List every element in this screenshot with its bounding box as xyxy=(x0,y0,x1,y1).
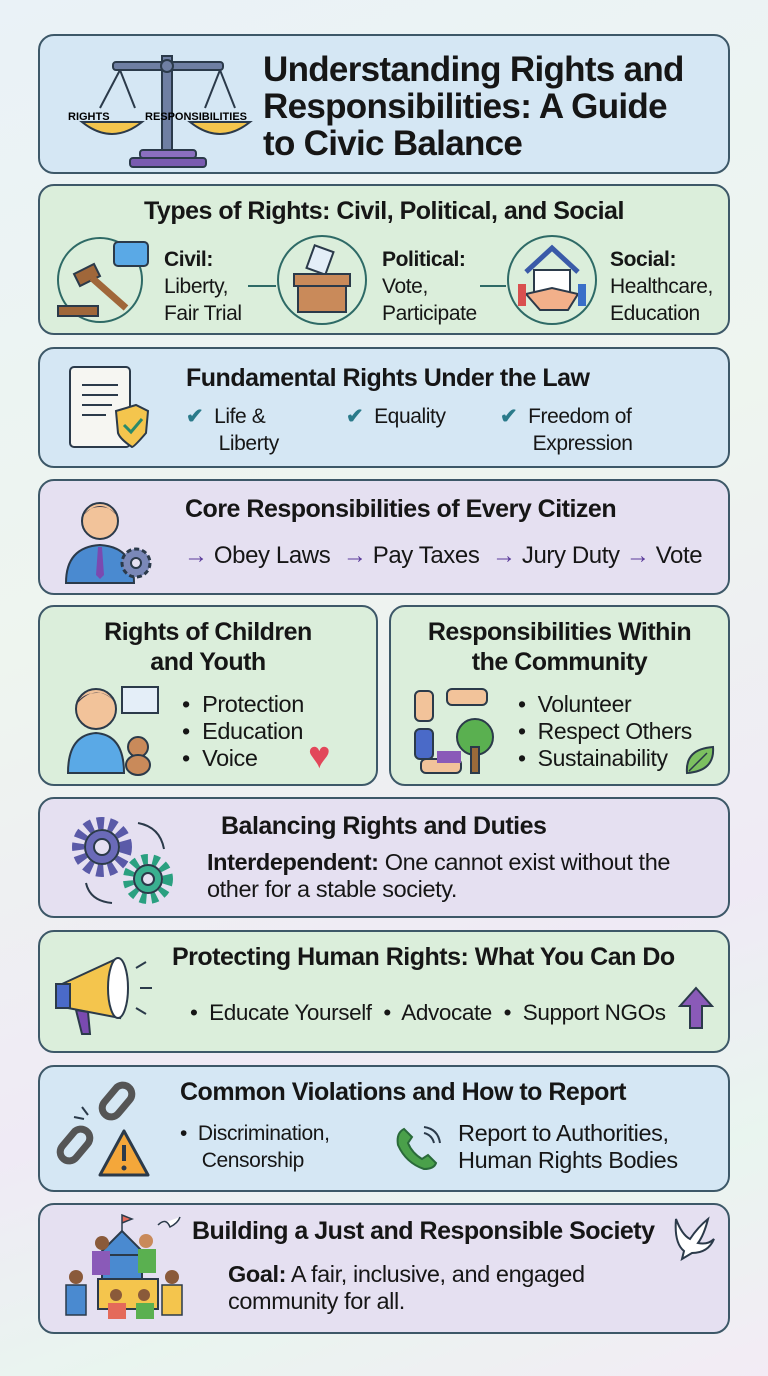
icon: phone xyxy=(396,1126,441,1170)
bullets: • Respect Others xyxy=(518,718,692,744)
icon: people castle xyxy=(65,1214,183,1319)
panel: violations xyxy=(38,1065,730,1192)
violations list: • Discrimination, xyxy=(180,1122,330,1145)
icon: scales: RESPONSIBILITIES xyxy=(145,111,247,123)
heading: Fundamental Rights Under the Law xyxy=(186,364,589,392)
goal text: community for all. xyxy=(228,1288,405,1314)
title text xyxy=(263,50,684,163)
civil text xyxy=(164,248,242,325)
icon: megaphone xyxy=(55,957,152,1035)
icon: document shield xyxy=(69,366,149,448)
panel: title xyxy=(38,34,730,174)
heading: and Youth xyxy=(150,648,266,676)
goal text xyxy=(228,1261,585,1314)
title text: to Civic Balance xyxy=(263,124,522,163)
checklist: ✔ Life & xyxy=(186,405,265,428)
icon: ballot box xyxy=(277,235,367,325)
heading: Protecting Human Rights: What You Can Do xyxy=(172,943,675,971)
violations list xyxy=(180,1122,330,1172)
civil text: Liberty, xyxy=(164,275,228,298)
checklist: Liberty xyxy=(219,432,279,455)
bullets: • Education xyxy=(182,718,303,744)
bullets: • Protection xyxy=(182,691,304,717)
heading: Core Responsibilities of Every Citizen xyxy=(185,495,616,523)
icon: child book bear xyxy=(67,686,159,776)
bullets xyxy=(182,691,304,771)
heading: the Community xyxy=(472,648,647,676)
heading: Common Violations and How to Report xyxy=(180,1078,626,1106)
panel: building society xyxy=(38,1203,730,1334)
icon: scales xyxy=(68,55,253,168)
icon: hands tree xyxy=(414,688,494,774)
icon: heart: ♥ xyxy=(308,735,331,777)
civil text: Fair Trial xyxy=(164,302,242,325)
action list: • Educate Yourself • Advocate • Support NGOs xyxy=(190,1000,666,1025)
panel: community responsibilities xyxy=(389,605,730,786)
bullets: • Volunteer xyxy=(518,691,631,717)
checklist: ✔ Freedom of xyxy=(500,405,631,428)
political text: Participate xyxy=(382,302,477,325)
icon: scales: RIGHTS xyxy=(68,111,110,123)
heading xyxy=(104,618,312,676)
icon: gavel xyxy=(57,237,149,323)
violations list: Censorship xyxy=(202,1149,304,1172)
checklist: Expression xyxy=(533,432,632,455)
heading xyxy=(428,618,691,676)
panel: children rights xyxy=(38,605,378,786)
panel: types of rights xyxy=(38,184,730,335)
icon: broken chain warning xyxy=(56,1082,150,1176)
bullets xyxy=(518,691,692,771)
political text: Vote, xyxy=(382,275,428,298)
panel: fundamental rights xyxy=(38,347,730,468)
goal text: Goal: A fair, inclusive, and engaged xyxy=(228,1261,585,1287)
responsibilities flow: → Obey Laws → Pay Taxes → Jury Duty → Vote xyxy=(184,542,702,569)
panel: balancing xyxy=(38,797,730,918)
icon: gears xyxy=(72,817,173,904)
civil text: Civil: xyxy=(164,248,213,271)
title text: Understanding Rights and xyxy=(263,50,684,89)
heading: Building a Just and Responsible Society xyxy=(192,1217,655,1245)
heading: Balancing Rights and Duties xyxy=(221,812,546,840)
title text: Responsibilities: A Guide xyxy=(263,87,667,126)
icon: citizen gear xyxy=(65,502,152,584)
social text xyxy=(610,248,713,325)
social text: Education xyxy=(610,302,700,325)
checklist xyxy=(186,405,632,455)
icon: dove xyxy=(674,1216,715,1261)
body text: other for a stable society. xyxy=(207,876,457,902)
body text: Interdependent: One cannot exist without the xyxy=(207,849,670,875)
icon: leaf xyxy=(686,746,714,774)
social text: Healthcare, xyxy=(610,275,713,298)
report text xyxy=(458,1120,678,1173)
bullets: • Voice xyxy=(182,745,258,771)
heading: Responsibilities Within xyxy=(428,618,691,646)
heading: Rights of Children xyxy=(104,618,312,646)
report text: Report to Authorities, xyxy=(458,1120,669,1146)
bullets: • Sustainability xyxy=(518,745,668,771)
political text xyxy=(382,248,477,325)
checklist: ✔ Equality xyxy=(346,405,446,428)
report text: Human Rights Bodies xyxy=(458,1147,678,1173)
icon: house handshake xyxy=(507,235,597,325)
icon: up arrow xyxy=(678,986,714,1029)
social text: Social: xyxy=(610,248,676,271)
panel: core responsibilities xyxy=(38,479,730,595)
panel: protecting human rights xyxy=(38,930,730,1053)
body text xyxy=(207,849,670,902)
heading: Types of Rights: Civil, Political, and Social xyxy=(144,197,624,225)
political text: Political: xyxy=(382,248,466,271)
